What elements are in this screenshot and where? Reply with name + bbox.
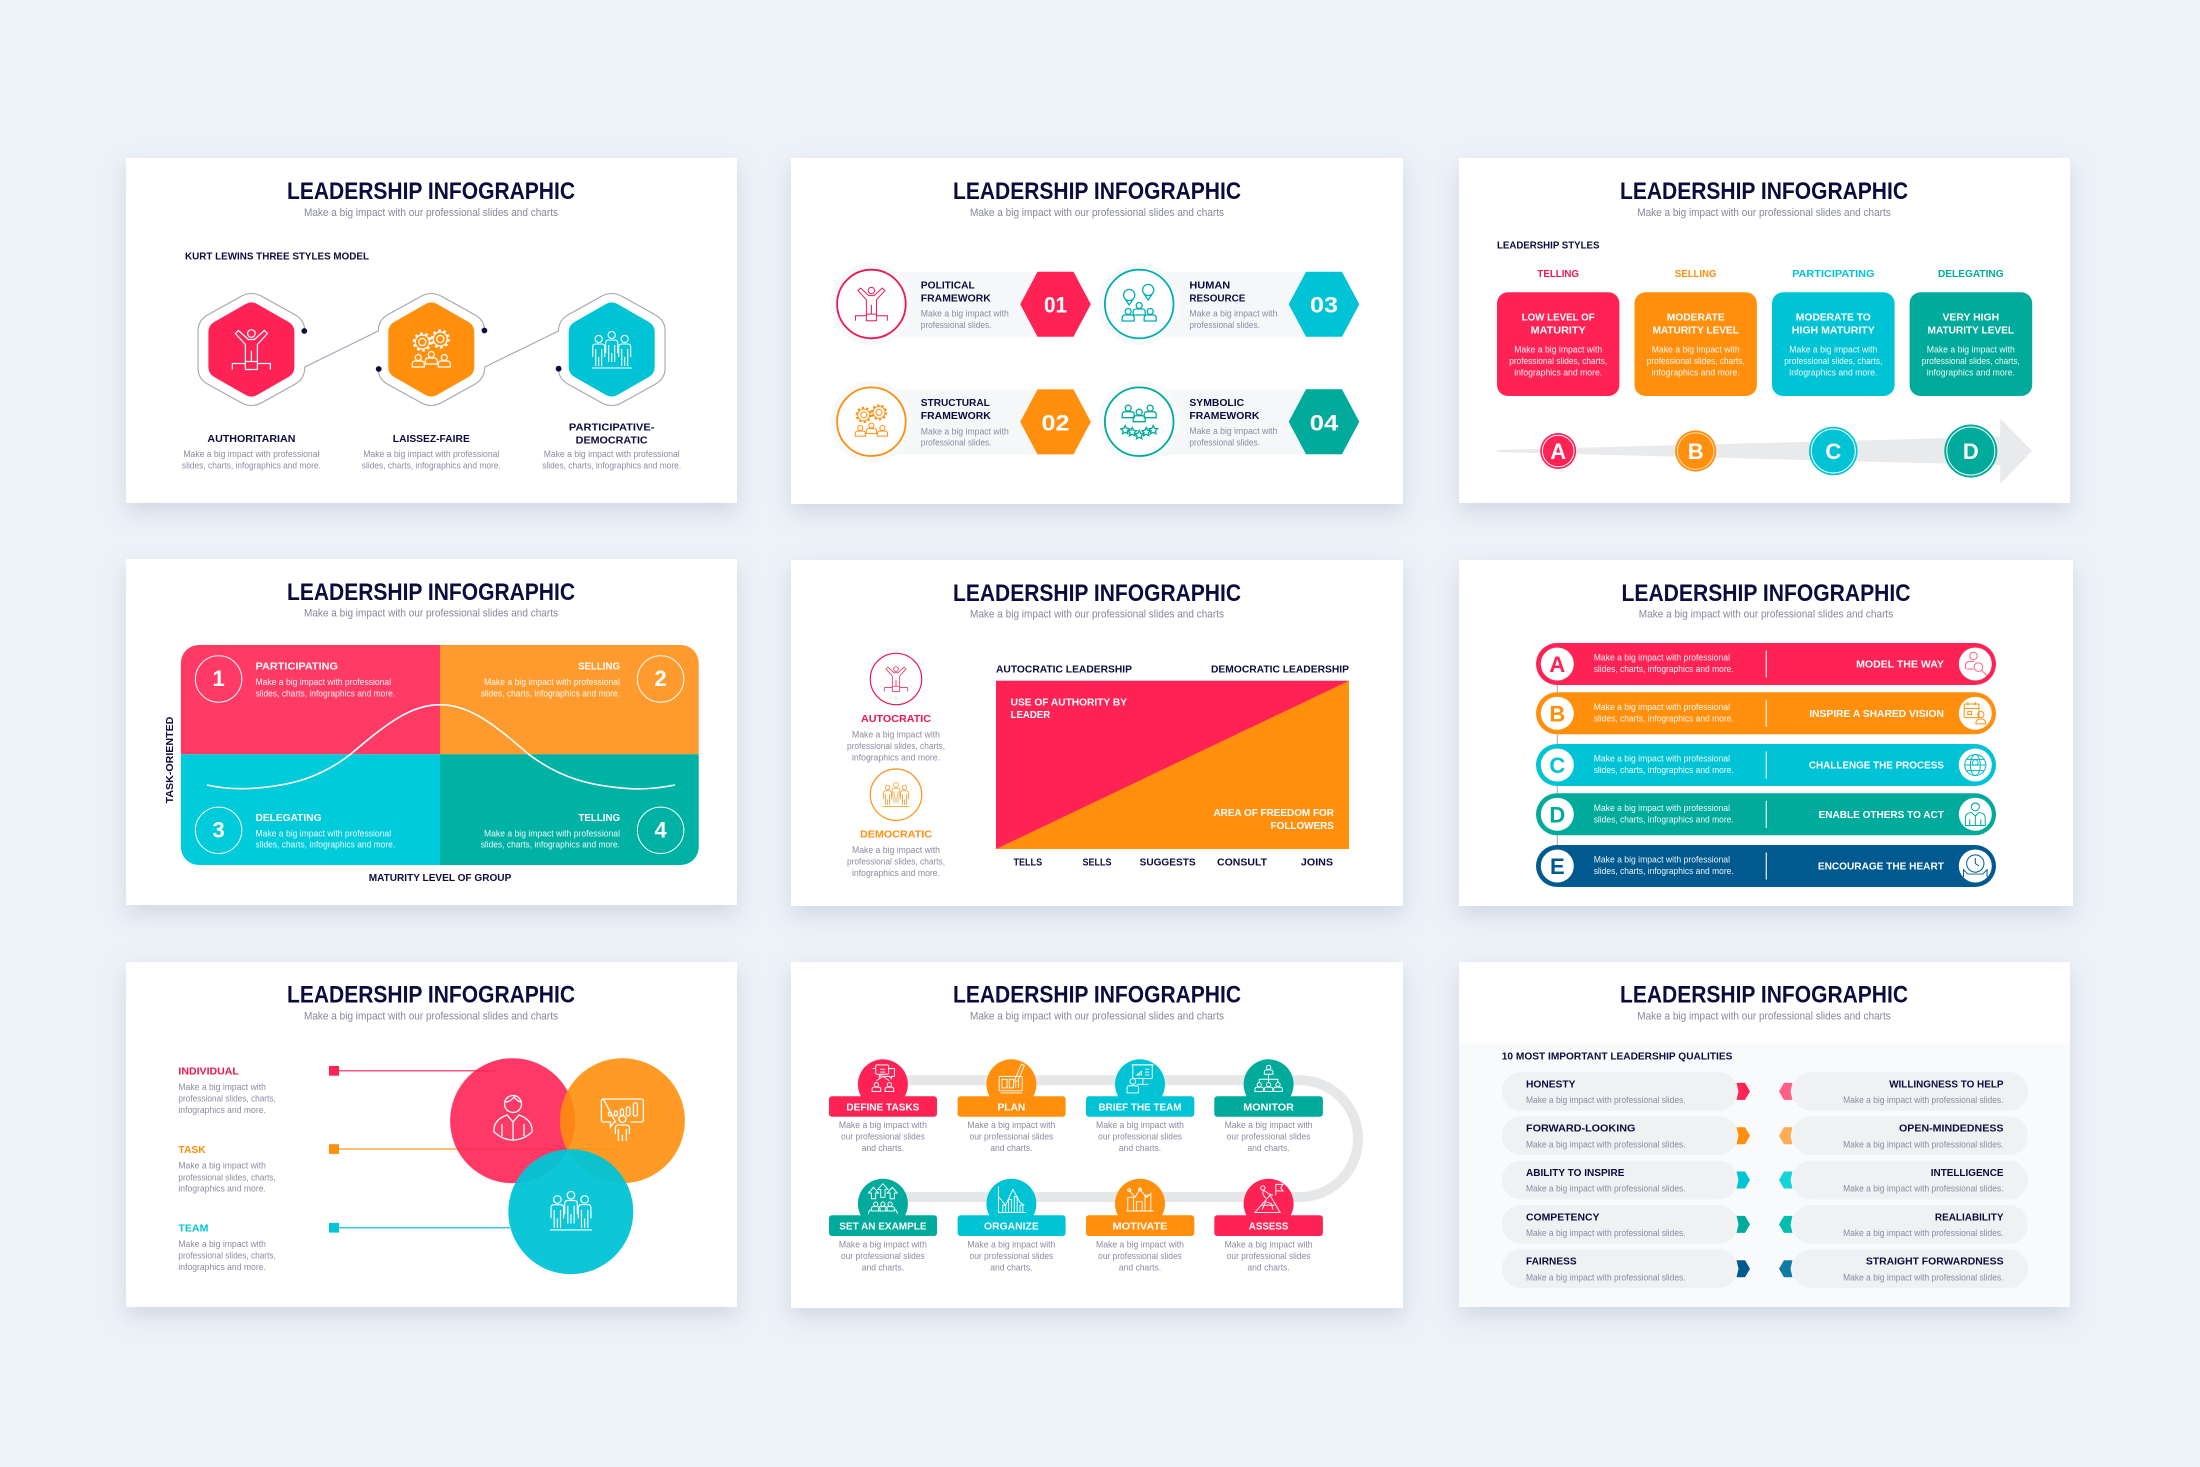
column: delegating (1910, 268, 2032, 396)
step: brief the team (1086, 1059, 1194, 1153)
panel: autocratic vs democratic (791, 560, 1403, 906)
column: selling: MATURITY LEVEL (1652, 324, 1740, 336)
item: political framework: FRAMEWORK (921, 292, 991, 304)
item: political framework: POLITICAL (921, 279, 975, 291)
text: team (178, 1223, 276, 1272)
title: LEADERSHIP INFOGRAPHIC (287, 579, 575, 606)
step: motivate: MOTIVATE (1112, 1220, 1168, 1232)
style: autocratic (847, 653, 945, 762)
panel: maturity quadrant (126, 559, 737, 905)
column: telling: Make a big impact with (1514, 344, 1602, 354)
marker A: A (1550, 439, 1566, 464)
quality: fairness: FAIRNESS (1526, 1256, 1577, 1268)
quality: competency: COMPETENCY (1526, 1211, 1600, 1223)
quality: reliability (1779, 1205, 2028, 1244)
quadrant: participating: Make a big impact with professional (256, 677, 391, 687)
quality: forward-looking: FORWARD-LOOKING (1526, 1123, 1635, 1135)
style: democratic: professional slides, charts, (847, 857, 945, 867)
text: participative-democratic: Make a big impact with professional (544, 449, 680, 459)
quadrant: participating: slides, charts, infographics and more. (256, 689, 395, 699)
hexagon: authoritarian (220, 314, 283, 385)
quality: reliability: Make a big impact with professional slides. (1843, 1228, 2004, 1238)
chart: authority vs freedom: LEADER (1011, 709, 1051, 721)
step: set an example: Make a big impact with (839, 1239, 927, 1249)
item: structural framework: professional slides. (921, 438, 991, 448)
column: participating: HIGH MATURITY (1792, 324, 1875, 336)
text: individual: infographics and more. (178, 1105, 266, 1115)
text: laissez-faire: LAISSEZ-FAIRE (393, 433, 470, 445)
step: assess (1214, 1179, 1323, 1272)
item: human resource: RESOURCE (1189, 292, 1245, 304)
quadrant: delegating: 3 (212, 817, 225, 842)
step: brief the team: our professional slides (1098, 1131, 1182, 1141)
subtitle: Make a big impact with our professional slides and charts (1639, 609, 1894, 621)
quality: straight forwardness: Make a big impact with professional slides. (1843, 1272, 2004, 1282)
text: authoritarian: AUTHORITARIAN (207, 433, 295, 445)
lower tinted area (1459, 1043, 2070, 1307)
item: symbolic framework: 04 (1310, 410, 1339, 435)
connector dots (301, 328, 561, 372)
column: participating: Make a big impact with (1789, 344, 1877, 354)
bar B: inspire a shared vision (1536, 692, 1996, 734)
title: LEADERSHIP INFOGRAPHIC (953, 981, 1241, 1008)
text: individual: Make a big impact with (178, 1082, 266, 1092)
chart: authority vs freedom: USE OF AUTHORITY BY (1011, 696, 1127, 708)
item: symbolic framework: Make a big impact with (1189, 426, 1277, 436)
style: autocratic: infographics and more. (852, 752, 940, 762)
bar E: encourage the heart: Make a big impact with professional (1594, 855, 1730, 865)
venn circle: individual (450, 1058, 575, 1183)
item: political framework: professional slides. (921, 320, 991, 330)
panel: ten qualities (1459, 962, 2070, 1307)
bar C: challenge the process: Make a big impact with professional (1594, 754, 1730, 764)
text: participative-democratic: DEMOCRATIC (576, 435, 648, 447)
quadrant: telling: slides, charts, infographics and more. (481, 840, 620, 850)
column: telling: TELLING (1537, 268, 1579, 280)
step: plan: PLAN (998, 1101, 1025, 1113)
item: human resource: 03 (1310, 293, 1338, 318)
bar C: challenge the process: slides, charts, infographics and more. (1594, 765, 1734, 775)
bar D: enable others to act: D (1549, 802, 1565, 827)
title: LEADERSHIP INFOGRAPHIC (287, 178, 575, 205)
text: task: professional slides, charts, (178, 1172, 276, 1182)
quadrant: delegating: slides, charts, infographics and more. (256, 840, 395, 850)
column: telling: LOW LEVEL OF (1522, 311, 1595, 323)
chart: authority vs freedom (996, 664, 1349, 868)
quadrant: delegating (181, 754, 440, 865)
bar E: encourage the heart: E (1550, 854, 1565, 879)
text: participative-democratic: slides, charts, infographics and more. (542, 461, 681, 471)
text: participative-democratic (542, 422, 681, 471)
step: motivate (1086, 1179, 1194, 1272)
column: selling: infographics and more. (1652, 367, 1740, 377)
quadrant: telling: Make a big impact with professional (484, 828, 620, 838)
quality: honesty (1502, 1072, 1750, 1111)
step: define tasks: Make a big impact with (839, 1120, 927, 1130)
column: telling (1497, 268, 1619, 396)
chart: authority vs freedom: SELLS (1082, 856, 1112, 868)
quality: fairness (1502, 1249, 1750, 1288)
step: plan: and charts. (990, 1143, 1033, 1153)
chart: authority vs freedom: JOINS (1301, 856, 1333, 868)
text: team: infographics and more. (178, 1262, 266, 1272)
bar A: model the way: slides, charts, infographics and more. (1594, 664, 1734, 674)
column: delegating: Make a big impact with (1927, 344, 2015, 354)
quadrant: selling: SELLING (578, 660, 620, 672)
chart: authority vs freedom: SUGGESTS (1140, 856, 1196, 868)
connector outline hexagons (198, 294, 665, 406)
quality: intelligence: Make a big impact with professional slides. (1843, 1184, 2004, 1194)
bar E: encourage the heart: ENCOURAGE THE HEART (1818, 861, 1944, 873)
quadrant: telling: 4 (654, 817, 667, 842)
step: brief the team: and charts. (1119, 1143, 1161, 1153)
text: individual: INDIVIDUAL (178, 1066, 239, 1078)
title: LEADERSHIP INFOGRAPHIC (1620, 178, 1908, 205)
panel: four frameworks (791, 158, 1403, 504)
text: task: infographics and more. (178, 1184, 266, 1194)
style: democratic: DEMOCRATIC (860, 828, 932, 840)
text: authoritarian: slides, charts, infographics and more. (182, 461, 321, 471)
style: democratic (847, 769, 945, 878)
marker C (1809, 427, 1858, 475)
bar A: model the way: Make a big impact with professional (1594, 653, 1730, 663)
marker A (1540, 433, 1576, 469)
quality: ability to inspire (1502, 1161, 1750, 1200)
quality: competency (1502, 1205, 1750, 1244)
subtitle: Make a big impact with our professional slides and charts (304, 207, 558, 219)
text: team: professional slides, charts, (178, 1251, 276, 1261)
chart: authority vs freedom: CONSULT (1217, 856, 1268, 868)
track (882, 1080, 1358, 1197)
column: participating: infographics and more. (1789, 367, 1877, 377)
subtitle: Make a big impact with our professional slides and charts (304, 608, 558, 620)
item: human resource: HUMAN (1189, 279, 1230, 291)
step: motivate: Make a big impact with (1096, 1239, 1184, 1249)
step: monitor: our professional slides (1227, 1131, 1311, 1141)
step: define tasks (829, 1059, 937, 1153)
marker D (1944, 424, 1997, 478)
step: organize: our professional slides (970, 1251, 1054, 1261)
text: task: Make a big impact with (178, 1161, 266, 1171)
column: participating: professional slides, charts, (1784, 356, 1882, 366)
bar D: enable others to act: slides, charts, infographics and more. (1594, 814, 1734, 824)
bar B: inspire a shared vision: INSPIRE A SHARED VISION (1809, 708, 1944, 720)
leader line: team (329, 1223, 510, 1233)
panel: five practices (1459, 560, 2073, 906)
column: telling: MATURITY (1531, 324, 1586, 336)
style: autocratic: Make a big impact with (852, 729, 940, 739)
quadrant: delegating: DELEGATING (256, 812, 322, 824)
text: task (178, 1144, 276, 1194)
column: delegating: MATURITY LEVEL (1928, 324, 2015, 336)
step: plan (958, 1059, 1066, 1153)
column: participating: MODERATE TO (1796, 311, 1871, 323)
step: plan: Make a big impact with (967, 1120, 1055, 1130)
step: monitor: and charts. (1247, 1143, 1290, 1153)
step: define tasks: and charts. (862, 1143, 904, 1153)
item: human resource (1098, 263, 1359, 345)
step: organize (958, 1179, 1066, 1272)
marker D: D (1963, 439, 1979, 464)
title: LEADERSHIP INFOGRAPHIC (287, 981, 575, 1008)
subtitle: Make a big impact with our professional slides and charts (970, 207, 1224, 219)
chart: authority vs freedom: AREA OF FREEDOM FOR (1214, 807, 1334, 819)
bell curve (207, 705, 675, 789)
step: monitor: MONITOR (1243, 1101, 1294, 1113)
step: brief the team: Make a big impact with (1096, 1120, 1184, 1130)
step: set an example: SET AN EXAMPLE (839, 1220, 927, 1232)
quality: intelligence (1779, 1161, 2028, 1200)
quality: willingness to help (1779, 1072, 2028, 1111)
heading: model name: KURT LEWINS THREE STYLES MODEL (185, 250, 370, 262)
text: authoritarian: Make a big impact with professional (183, 449, 319, 459)
step: set an example: our professional slides (841, 1251, 925, 1261)
column: selling: Make a big impact with (1652, 344, 1740, 354)
text: authoritarian (182, 433, 321, 471)
item: structural framework: 02 (1042, 410, 1070, 435)
step: set an example (829, 1179, 937, 1272)
quadrant: selling: 2 (654, 666, 667, 691)
step: plan: our professional slides (970, 1131, 1054, 1141)
step: motivate: our professional slides (1098, 1251, 1182, 1261)
subtitle: Make a big impact with our professional slides and charts (304, 1011, 558, 1023)
item: symbolic framework: SYMBOLIC (1189, 397, 1245, 409)
step: assess: and charts. (1247, 1262, 1290, 1272)
column: telling: infographics and more. (1514, 367, 1602, 377)
bar B: inspire a shared vision: Make a big impact with professional (1594, 702, 1730, 712)
step: monitor: Make a big impact with (1225, 1120, 1313, 1130)
bar B: inspire a shared vision: slides, charts, infographics and more. (1594, 713, 1734, 723)
column: selling (1634, 268, 1757, 396)
heading: ten qualities: 10 MOST IMPORTANT LEADERSHIP QUALITIES (1502, 1050, 1732, 1062)
quality: honesty: HONESTY (1526, 1078, 1575, 1090)
step: organize: Make a big impact with (967, 1239, 1055, 1249)
step: define tasks: our professional slides (841, 1131, 925, 1141)
text: task: TASK (178, 1144, 206, 1156)
bar A: model the way: A (1549, 652, 1565, 677)
quadrant: delegating: Make a big impact with professional (256, 828, 391, 838)
item: political framework (830, 263, 1091, 345)
text: participative-democratic: PARTICIPATIVE- (569, 422, 655, 434)
hexagon: participative-democratic (580, 314, 643, 385)
item: human resource: professional slides. (1189, 320, 1260, 330)
connector line (1556, 684, 1558, 846)
item: structural framework: STRUCTURAL (921, 397, 990, 409)
bar B: inspire a shared vision: B (1549, 701, 1565, 726)
panel: individual task team venn (126, 962, 737, 1307)
column: delegating: professional slides, charts, (1922, 356, 2020, 366)
quality: open-mindedness: OPEN-MINDEDNESS (1899, 1123, 2004, 1135)
arrow: progression (1497, 418, 2032, 484)
quadrant: selling (440, 645, 699, 754)
item: political framework: 01 (1044, 293, 1067, 318)
quality: straight forwardness: STRAIGHT FORWARDNESS (1866, 1256, 2003, 1268)
chart: authority vs freedom: FOLLOWERS (1271, 820, 1334, 832)
column: selling: professional slides, charts, (1647, 356, 1745, 366)
quadrant: selling: Make a big impact with professional (484, 677, 620, 687)
quality: forward-looking (1502, 1116, 1750, 1155)
quality: straight forwardness (1779, 1249, 2028, 1288)
quality: competency: Make a big impact with professional slides. (1526, 1228, 1686, 1238)
bar E: encourage the heart: slides, charts, infographics and more. (1594, 866, 1734, 876)
bar D: enable others to act (1536, 793, 1996, 835)
style: democratic: infographics and more. (852, 868, 940, 878)
style: autocratic: AUTOCRATIC (861, 713, 931, 725)
text: laissez-faire: slides, charts, infographics and more. (362, 461, 501, 471)
bar C: challenge the process (1536, 744, 1996, 786)
bar A: model the way: MODEL THE WAY (1856, 659, 1944, 671)
step: brief the team: BRIEF THE TEAM (1099, 1101, 1182, 1113)
quadrant: selling: slides, charts, infographics and more. (481, 689, 620, 699)
leader line: task (329, 1144, 620, 1154)
quality: willingness to help: Make a big impact with professional slides. (1843, 1095, 2004, 1105)
item: symbolic framework (1098, 381, 1359, 463)
column: participating (1772, 268, 1895, 396)
item: structural framework (830, 381, 1091, 463)
item: symbolic framework: professional slides. (1189, 437, 1260, 447)
panel: leadership styles (1459, 158, 2070, 503)
quality: reliability: REALIABILITY (1935, 1211, 2003, 1223)
text: laissez-faire (362, 433, 501, 471)
axis label: maturity level: MATURITY LEVEL OF GROUP (369, 872, 511, 884)
subtitle: Make a big impact with our professional slides and charts (970, 1011, 1224, 1023)
text: laissez-faire: Make a big impact with professional (363, 449, 499, 459)
quadrant: participating: PARTICIPATING (256, 660, 338, 672)
column: participating: PARTICIPATING (1792, 268, 1875, 280)
quadrant: telling (440, 754, 699, 865)
bar A: model the way (1536, 643, 1996, 685)
title: LEADERSHIP INFOGRAPHIC (1622, 580, 1911, 607)
marker C: C (1825, 439, 1841, 464)
column: delegating: infographics and more. (1927, 367, 2015, 377)
panel: process path (791, 962, 1403, 1308)
text: individual: professional slides, charts, (178, 1094, 276, 1104)
quality: open-mindedness: Make a big impact with professional slides. (1843, 1139, 2004, 1149)
step: organize: ORGANIZE (984, 1220, 1039, 1232)
chart: authority vs freedom: TELLS (1014, 856, 1042, 868)
venn circle: task (560, 1058, 685, 1183)
quality: fairness: Make a big impact with professional slides. (1526, 1272, 1686, 1282)
subtitle: Make a big impact with our professional slides and charts (970, 609, 1224, 621)
quality: intelligence: INTELLIGENCE (1931, 1167, 2004, 1179)
text: individual (178, 1066, 276, 1115)
leader line: individual (329, 1066, 496, 1076)
title: LEADERSHIP INFOGRAPHIC (953, 580, 1241, 607)
step: organize: and charts. (990, 1262, 1033, 1272)
column: delegating: VERY HIGH (1942, 311, 1999, 323)
column: telling: professional slides, charts, (1509, 356, 1607, 366)
venn circle: team (508, 1149, 633, 1274)
style: democratic: Make a big impact with (852, 845, 940, 855)
bar D: enable others to act: ENABLE OTHERS TO ACT (1819, 809, 1944, 821)
quality: ability to inspire: Make a big impact with professional slides. (1526, 1184, 1686, 1194)
quality: ability to inspire: ABILITY TO INSPIRE (1526, 1167, 1624, 1179)
step: define tasks: DEFINE TASKS (846, 1101, 919, 1113)
marker B (1675, 430, 1716, 472)
quality: forward-looking: Make a big impact with professional slides. (1526, 1139, 1686, 1149)
style: autocratic: professional slides, charts, (847, 741, 945, 751)
axis label: task-oriented: TASK-ORIENTED (164, 716, 176, 803)
step: motivate: and charts. (1119, 1262, 1161, 1272)
subtitle: Make a big impact with our professional slides and charts (1637, 207, 1891, 219)
marker B: B (1688, 439, 1704, 464)
item: structural framework: Make a big impact with (921, 426, 1009, 436)
step: assess: our professional slides (1227, 1251, 1311, 1261)
bar E: encourage the heart (1536, 845, 1996, 887)
bar D: enable others to act: Make a big impact with professional (1594, 803, 1730, 813)
column: delegating: DELEGATING (1938, 268, 2004, 280)
step: assess: ASSESS (1249, 1220, 1288, 1232)
item: symbolic framework: FRAMEWORK (1189, 410, 1260, 422)
hexagon: laissez-faire (400, 314, 463, 385)
quality: willingness to help: WILLINGNESS TO HELP (1889, 1078, 2004, 1090)
chart: authority vs freedom: DEMOCRATIC LEADERSHIP (1211, 664, 1349, 676)
item: human resource: Make a big impact with (1189, 309, 1277, 319)
column: selling: SELLING (1675, 268, 1716, 280)
heading: leadership styles: LEADERSHIP STYLES (1497, 240, 1599, 252)
quality: honesty: Make a big impact with professional slides. (1526, 1095, 1686, 1105)
bar C: challenge the process: C (1549, 753, 1565, 778)
item: political framework: Make a big impact with (921, 309, 1009, 319)
step: assess: Make a big impact with (1225, 1239, 1313, 1249)
title: LEADERSHIP INFOGRAPHIC (953, 178, 1241, 205)
step: monitor (1214, 1059, 1323, 1153)
quadrant: participating (181, 645, 440, 754)
column: selling: MODERATE (1667, 311, 1725, 323)
chart: authority vs freedom: AUTOCRATIC LEADERSHIP (996, 664, 1132, 676)
panel: Kurt Lewin three styles model (126, 158, 737, 503)
quality: open-mindedness (1779, 1116, 2028, 1155)
item: structural framework: FRAMEWORK (921, 410, 991, 422)
text: team: Make a big impact with (178, 1239, 266, 1249)
quadrant: participating: 1 (212, 666, 225, 691)
subtitle: Make a big impact with our professional slides and charts (1637, 1011, 1891, 1023)
text: team: TEAM (178, 1223, 209, 1235)
bar C: challenge the process: CHALLENGE THE PROCESS (1809, 760, 1944, 772)
quadrant: telling: TELLING (578, 812, 620, 824)
step: set an example: and charts. (862, 1262, 904, 1272)
title: LEADERSHIP INFOGRAPHIC (1620, 981, 1908, 1008)
